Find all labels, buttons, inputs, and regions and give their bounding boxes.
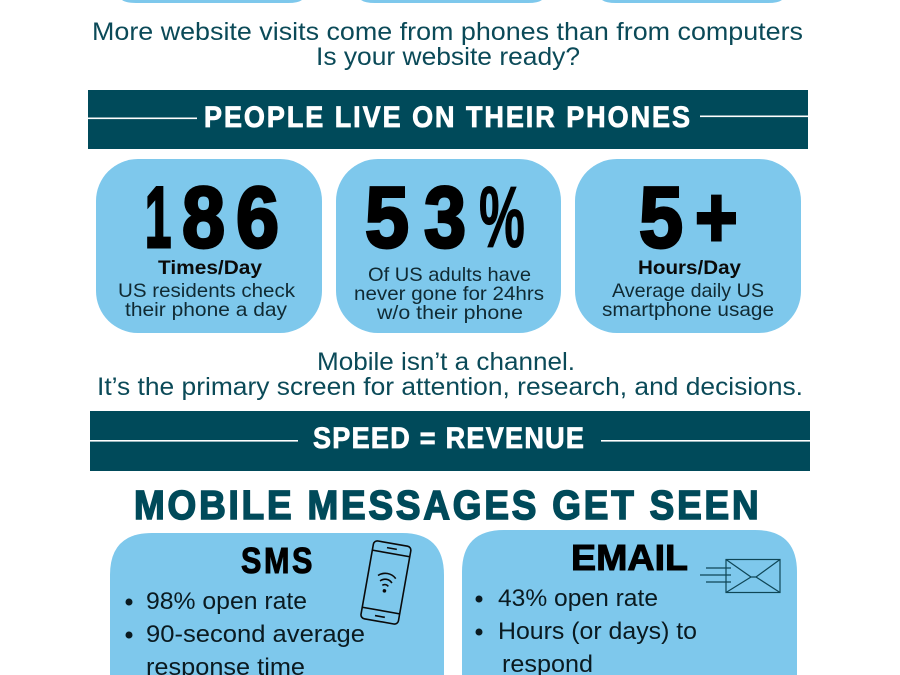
stat card: 5+ hours per day [575,159,801,333]
big number: 53%: 3 [424,171,466,266]
mobile statement text: Mobile isn’t a channel. [317,348,575,376]
stat card: 186 times per day: Times/Day [158,258,262,279]
icon: envelope with speed lines [700,560,780,592]
list: SMS bullets: 98% open rate [146,588,307,615]
panel: SMS: SMS [241,542,312,582]
banner: people live on their phones [88,90,808,149]
list: Email bullets: Hours (or days) to [498,618,697,645]
panel: Email: EMAIL [571,537,688,578]
big number: 5+: + [695,169,738,265]
list: SMS bullets: 90-second average [146,621,365,648]
top cards row (cropped) [122,0,782,3]
intro text [92,18,803,71]
icon: phone with wifi [360,540,411,625]
stat card: 186 times per day [96,159,322,333]
banner: speed = revenue [90,411,810,471]
big number: 186: 6 [236,170,279,266]
stat card: 5+ hours per day: smartphone usage [602,299,774,321]
stat card: 5+ hours per day: Average daily US [612,280,764,302]
intro text: More website visits come from phones than from computers [92,18,803,46]
mobile statement text: It’s the primary screen for attention, research, and decisions. [97,373,803,401]
big number: 5+ [639,169,738,266]
banner: speed = revenue: SPEED = REVENUE [313,422,584,455]
list: Email bullets: 43% open rate [498,585,658,612]
big number: 186: 1 [145,169,171,266]
stat card: 53 percent: Of US adults have [368,264,531,286]
big number: 53%: 5 [365,169,409,266]
list: SMS bullets [126,588,365,675]
heading: mobile messages get seen: MOBILE MESSAGES GET SEEN [134,483,759,528]
big number: 186 [145,169,279,266]
stat card: 186 times per day: their phone a day [125,299,287,321]
stat card: 5+ hours per day: Hours/Day [638,258,741,279]
intro text: Is your website ready? [316,43,580,71]
stat card: 53 percent: never gone for 24hrs [354,283,544,305]
big number: 53%: % [479,171,525,266]
big number: 5+: 5 [639,169,683,266]
mobile statement text [97,348,803,401]
big number: 53% [365,169,525,266]
panel: Email [462,530,797,675]
stat card: 53 percent [336,159,561,333]
list: Email bullets [476,585,697,675]
banner: people live on their phones: PEOPLE LIVE ON THEIR PHONES [204,101,690,134]
stat card: 53 percent: w/o their phone [376,302,523,324]
big number: 186: 8 [182,170,225,266]
panel: SMS [110,533,444,675]
stat card: 186 times per day: US residents check [118,280,295,302]
